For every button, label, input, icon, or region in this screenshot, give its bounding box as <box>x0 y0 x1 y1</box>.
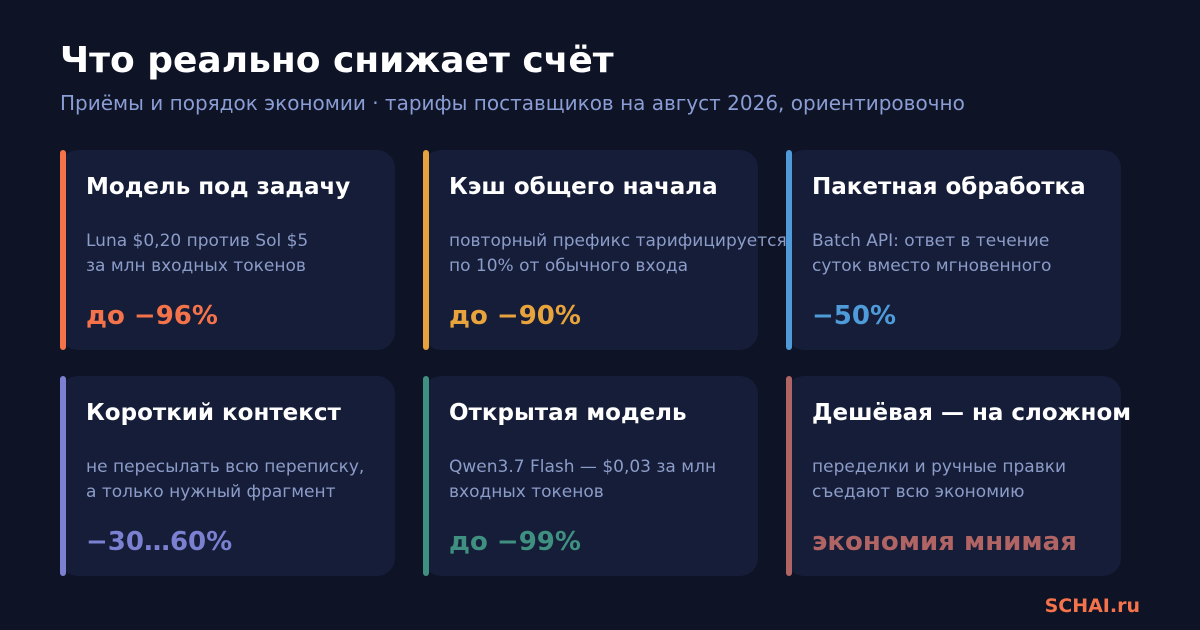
panel: short context: а только нужный фрагмент <box>86 482 336 502</box>
brand: SCHAI.ru <box>1045 595 1140 617</box>
panel: batch processing: суток вместо мгновенного <box>812 256 1051 276</box>
panel: model for the task: Luna $0,20 против Sol $5 <box>86 231 308 251</box>
subtitle: Приёмы и порядок экономии · тарифы поставщиков на август 2026, ориентировочно <box>60 91 965 115</box>
panel: batch processing: −50% <box>812 301 896 331</box>
panel: open model <box>423 376 758 576</box>
panel: open model: Qwen3.7 Flash — $0,03 за млн <box>449 457 716 477</box>
panel: cheap on complex: Дешёвая — на сложном <box>812 400 1131 426</box>
panel: short context: не пересылать всю переписку, <box>86 457 364 477</box>
panel: prefix cache: Кэш общего начала <box>449 174 718 200</box>
panel: cheap on complex: съедают всю экономию <box>812 482 1024 502</box>
panel: prefix cache: по 10% от обычного входа <box>449 256 688 276</box>
title: Что реально снижает счёт <box>60 40 614 81</box>
panel: cheap on complex <box>786 376 1131 576</box>
panel: open model: входных токенов <box>449 482 604 502</box>
panel: prefix cache: повторный префикс тарифицируется <box>449 231 787 251</box>
panel: short context <box>60 376 395 576</box>
panel: batch processing: Пакетная обработка <box>812 174 1086 200</box>
panel: prefix cache <box>423 150 787 350</box>
panel: batch processing <box>786 150 1121 350</box>
panel: open model: до −99% <box>449 527 581 557</box>
panel: model for the task: за млн входных токенов <box>86 256 306 276</box>
panel: batch processing: Batch API: ответ в течение <box>812 231 1049 251</box>
panel: short context: Короткий контекст <box>86 400 342 426</box>
panel: model for the task: Модель под задачу <box>86 174 350 200</box>
panel: open model: Открытая модель <box>449 400 687 426</box>
panel: cheap on complex: экономия мнимая <box>812 527 1077 557</box>
panel: model for the task <box>60 150 395 350</box>
panel: short context: −30…60% <box>86 527 232 557</box>
panel: model for the task: до −96% <box>86 301 218 331</box>
panel: cheap on complex: переделки и ручные правки <box>812 457 1066 477</box>
panel: prefix cache: до −90% <box>449 301 581 331</box>
